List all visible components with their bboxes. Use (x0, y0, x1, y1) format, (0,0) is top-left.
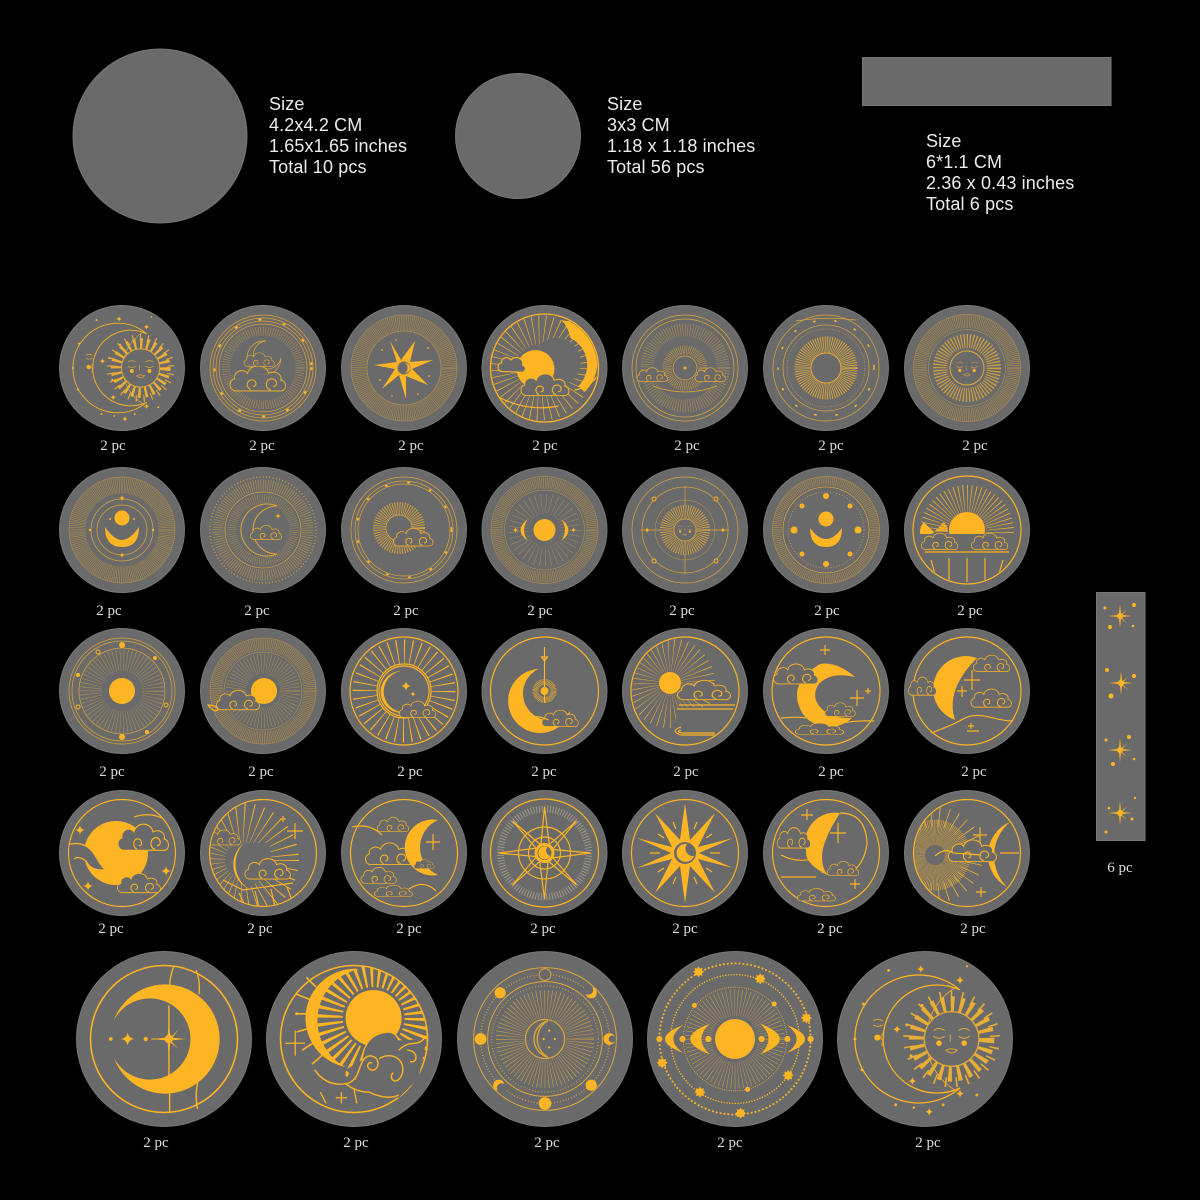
sticker r4c1: gold moon disc with clouds (60, 790, 184, 916)
label: 2 pc (817, 921, 843, 937)
label: 2 pc (244, 603, 270, 619)
sticker: vertical star strip (1096, 592, 1145, 840)
label: 2 pc (534, 1135, 560, 1151)
text: strip size: Size (926, 131, 962, 151)
label: 2 pc (397, 764, 423, 780)
text: small circle size: 3x3 CM (607, 115, 670, 135)
size swatch: 4.2 cm circle (73, 49, 247, 223)
size swatch: 3 cm circle (456, 74, 580, 198)
size swatch: strip rectangle (862, 58, 1111, 106)
sticker r3c7: crescent with sparks and clouds (904, 628, 1030, 754)
sticker r3c2: sun behind cloud with dense ring (200, 628, 326, 754)
label: 2 pc (530, 921, 556, 937)
text: strip size: Total 6 pcs (926, 194, 1013, 214)
text: small circle size: Size (607, 94, 643, 114)
label: 2 pc (143, 1135, 169, 1151)
label: 2 pc (673, 764, 699, 780)
label: 2 pc (814, 603, 840, 619)
label: 2 pc (248, 764, 274, 780)
sticker r1c6: radiant sun in orbit rings (764, 306, 888, 430)
sticker r1c5: sun with clouds and rings (622, 306, 748, 430)
sticker r3c1: disc and crescent in rings (60, 628, 184, 754)
sticker r3c3: crescent in ray circle (342, 628, 466, 754)
sticker r1c1: sun and crescent (60, 306, 184, 430)
sticker r1c4: sun, clouds and crescent (482, 306, 607, 430)
sticker large 1: crescent with star line (76, 952, 252, 1126)
text: large circle size: 1.65x1.65 inches (269, 136, 407, 156)
label: 2 pc (393, 603, 419, 619)
sticker large 2: sun with crescent and cloud (256, 952, 442, 1126)
text: strip size: 2.36 x 0.43 inches (926, 173, 1074, 193)
sticker r3c5: sun over clouds and waves (622, 628, 748, 757)
label: 2 pc (99, 764, 125, 780)
text: small circle size: 1.18 x 1.18 inches (607, 136, 755, 156)
sticker large 3: moon phases and rays (458, 952, 632, 1126)
label: 2 pc (818, 764, 844, 780)
sticker r4c3: crescent with clouds (342, 790, 466, 916)
sticker r4c4: compass star with crescent (482, 790, 607, 916)
sticker r3c4: crescent with pendant (482, 628, 607, 754)
label: 2 pc (962, 438, 988, 454)
label: 2 pc (961, 764, 987, 780)
label: 2 pc (343, 1135, 369, 1151)
label: 2 pc (396, 921, 422, 937)
sticker r2c2: crescent and cloud with rays (200, 468, 326, 592)
label: 2 pc (398, 438, 424, 454)
label: 2 pc (96, 603, 122, 619)
label: 2 pc (818, 438, 844, 454)
sticker r4c2: rays, crescent and cloud (200, 790, 326, 916)
sticker r2c4: disc flanked by crescents (482, 468, 607, 592)
label: 2 pc (531, 764, 557, 780)
sticker r1c3: eight point star (342, 306, 466, 430)
sticker r3c6: crescent among clouds (764, 628, 888, 754)
sticker r2c3: sun and cloud in rings (342, 468, 466, 592)
label: 2 pc (960, 921, 986, 937)
label: 2 pc (674, 438, 700, 454)
text: large circle size: 4.2x4.2 CM (269, 115, 362, 135)
sticker r2c6: moon phases column (764, 468, 888, 592)
sticker r2c5: sun face with orbits (622, 468, 748, 592)
label: 2 pc (527, 603, 553, 619)
label: 2 pc (957, 603, 983, 619)
label: 2 pc (717, 1135, 743, 1151)
text: large circle size: Total 10 pcs (269, 157, 367, 177)
label: 2 pc (672, 921, 698, 937)
sticker r1c7: sun face with dense ring (904, 306, 1030, 430)
sticker large 4: full moon with phases (648, 952, 822, 1126)
label: 2 pc (915, 1135, 941, 1151)
sticker r1c2: rings with moon and cloud (200, 306, 326, 430)
sticker r2c7: rising sun over clouds (904, 468, 1030, 594)
label: 2 pc (249, 438, 275, 454)
sticker r4c7: dark sun with rays, cloud and crescent (897, 790, 1030, 916)
label: 2 pc (100, 438, 126, 454)
sticker r4c5: ten point sun star with crescent (622, 790, 748, 916)
text: small circle size: Total 56 pcs (607, 157, 705, 177)
label: 2 pc (247, 921, 273, 937)
label: 6 pc (1107, 860, 1133, 876)
label: 2 pc (98, 921, 124, 937)
sticker large 5: sun face and crescent (838, 952, 1012, 1126)
sticker r4c6: crescent, clouds and sparks (764, 790, 888, 916)
sticker r2c1: moon and crescent bowl (60, 468, 184, 592)
label: 2 pc (532, 438, 558, 454)
text: strip size: 6*1.1 CM (926, 152, 1002, 172)
text: large circle size: Size (269, 94, 305, 114)
label: 2 pc (669, 603, 695, 619)
